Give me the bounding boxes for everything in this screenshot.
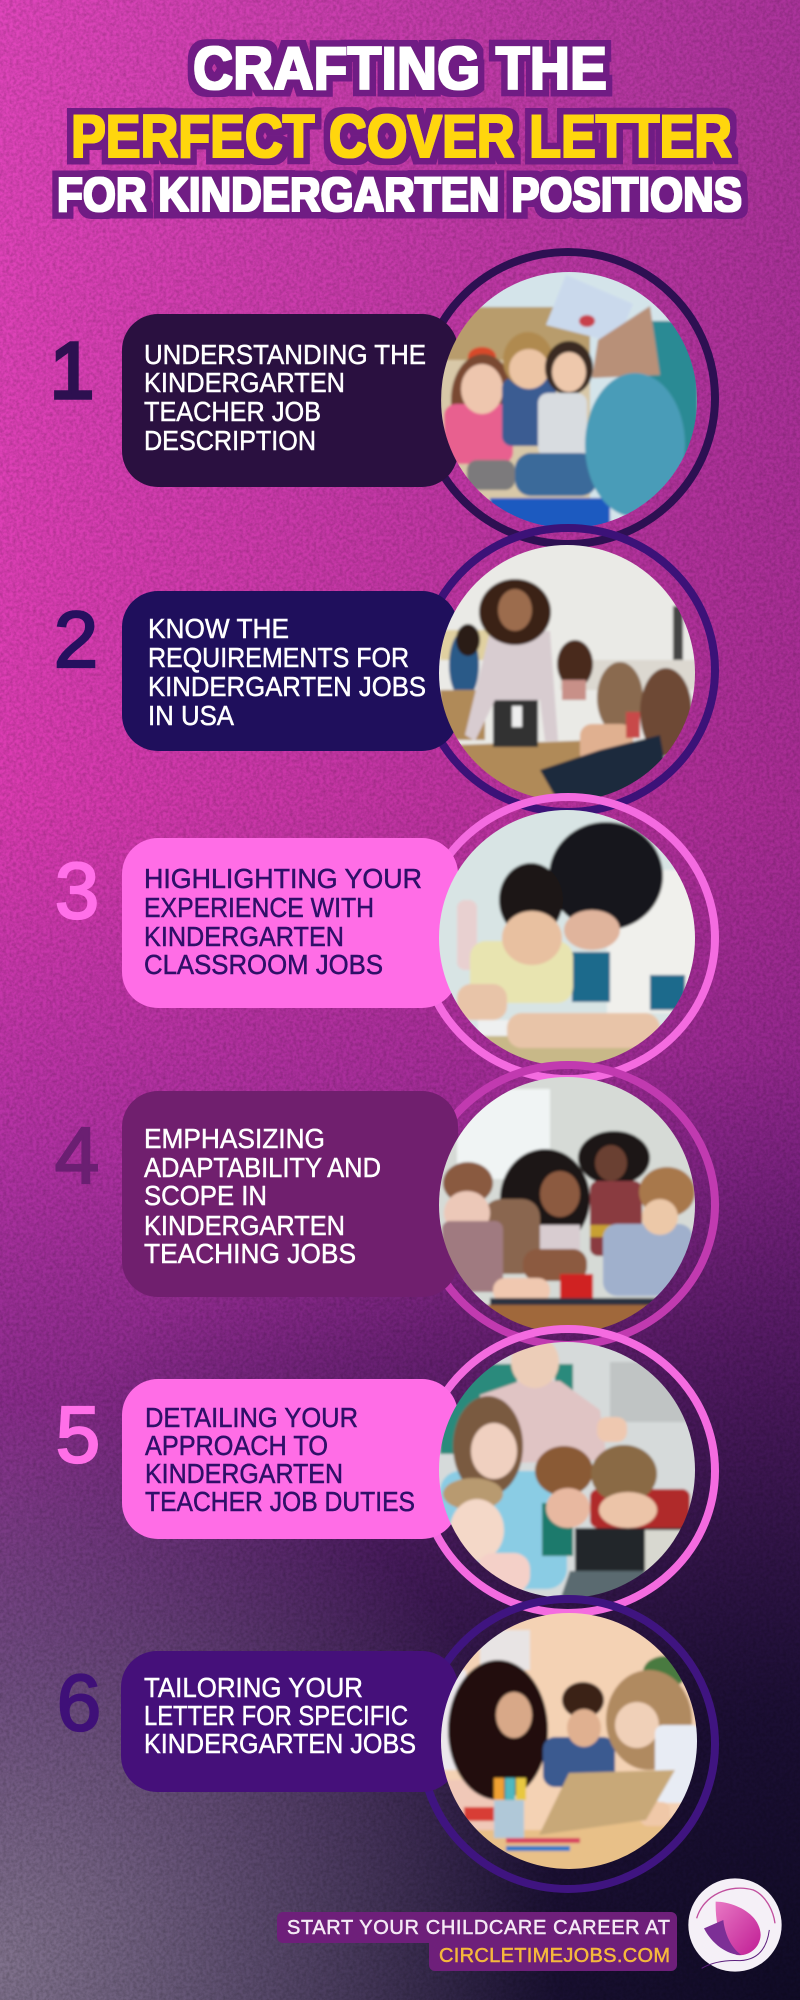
step 3 label box: CLASSROOM JOBS — [144, 949, 383, 980]
step 3 — [55, 797, 715, 1079]
photo 2: teacher at a classroom table — [435, 540, 700, 810]
step 3 label box: HIGHLIGHTING YOUR — [144, 863, 422, 894]
step 4 number: 4 — [55, 1111, 99, 1200]
step 6 label box: TAILORING YOUR — [144, 1672, 363, 1703]
step 6 label box — [121, 1651, 458, 1792]
step 3 label box — [122, 838, 458, 1008]
step 5 label box: APPROACH TO — [145, 1430, 328, 1461]
step 1 — [50, 252, 715, 544]
photo 1: children listening to a story — [440, 270, 700, 530]
step 3 label box: EXPERIENCE WITH — [144, 892, 374, 923]
step 6 label box: LETTER FOR SPECIFIC — [144, 1700, 408, 1731]
step 3 label box: KINDERGARTEN — [144, 921, 344, 952]
photo 3: teacher and girl drawing — [435, 805, 700, 1070]
step 4 label box: ADAPTABILITY AND — [144, 1152, 381, 1183]
footer call to action — [277, 1912, 677, 1971]
step 1 label box — [122, 314, 458, 487]
step 4 — [55, 1065, 715, 1345]
step 1 label box: DESCRIPTION — [144, 425, 316, 456]
step 5 label box — [122, 1379, 458, 1539]
footer label background — [277, 1912, 677, 1971]
ring 6 — [421, 1599, 715, 1889]
step 2 — [54, 528, 715, 812]
step 5 label box: TEACHER JOB DUTIES — [145, 1486, 415, 1517]
step 4 label box: SCOPE IN — [144, 1180, 267, 1211]
photo 6: teacher and children with a laptop — [436, 1608, 702, 1875]
step 6 — [57, 1599, 715, 1889]
step 2 label box: REQUIREMENTS FOR — [148, 642, 409, 673]
footer line 1: START YOUR CHILDCARE CAREER AT — [287, 1917, 670, 1939]
ring 4 — [421, 1065, 715, 1345]
photo 5: teacher and children around a tablet — [435, 1336, 700, 1603]
ring 3 — [421, 797, 715, 1079]
step 2 label box: IN USA — [148, 700, 234, 731]
step 1 number: 1 — [50, 326, 94, 415]
step 1 label box: KINDERGARTEN — [144, 367, 345, 398]
step 2 label box: KINDERGARTEN JOBS — [148, 671, 426, 702]
logo — [688, 1878, 782, 1972]
step 5 label box: DETAILING YOUR — [145, 1402, 358, 1433]
title: CRAFTING THE — [193, 35, 607, 102]
step 1 label box: TEACHER JOB — [144, 396, 321, 427]
step 6 label box: KINDERGARTEN JOBS — [144, 1728, 416, 1759]
step 5 number: 5 — [56, 1390, 100, 1479]
step 5 label box: KINDERGARTEN — [145, 1458, 343, 1489]
step 3 number: 3 — [55, 846, 99, 935]
step 2 label box — [122, 591, 458, 751]
title — [57, 35, 742, 222]
step 4 label box: TEACHING JOBS — [144, 1238, 356, 1269]
step 6 number: 6 — [57, 1658, 101, 1747]
ring 1 — [421, 252, 715, 544]
ring 5 — [421, 1329, 715, 1613]
step 5 — [56, 1329, 715, 1613]
step 4 label box: EMPHASIZING — [144, 1123, 325, 1154]
photo 4: teacher building blocks with children — [435, 1072, 700, 1337]
step 1 label box: UNDERSTANDING THE — [144, 339, 426, 370]
step 4 label box — [122, 1091, 458, 1297]
step 2 number: 2 — [54, 595, 98, 684]
step 2 label box: KNOW THE — [148, 613, 289, 644]
ring 2 — [421, 528, 715, 812]
step 4 label box: KINDERGARTEN — [144, 1210, 345, 1241]
footer line 2: CIRCLETIMEJOBS.COM — [439, 1945, 670, 1967]
